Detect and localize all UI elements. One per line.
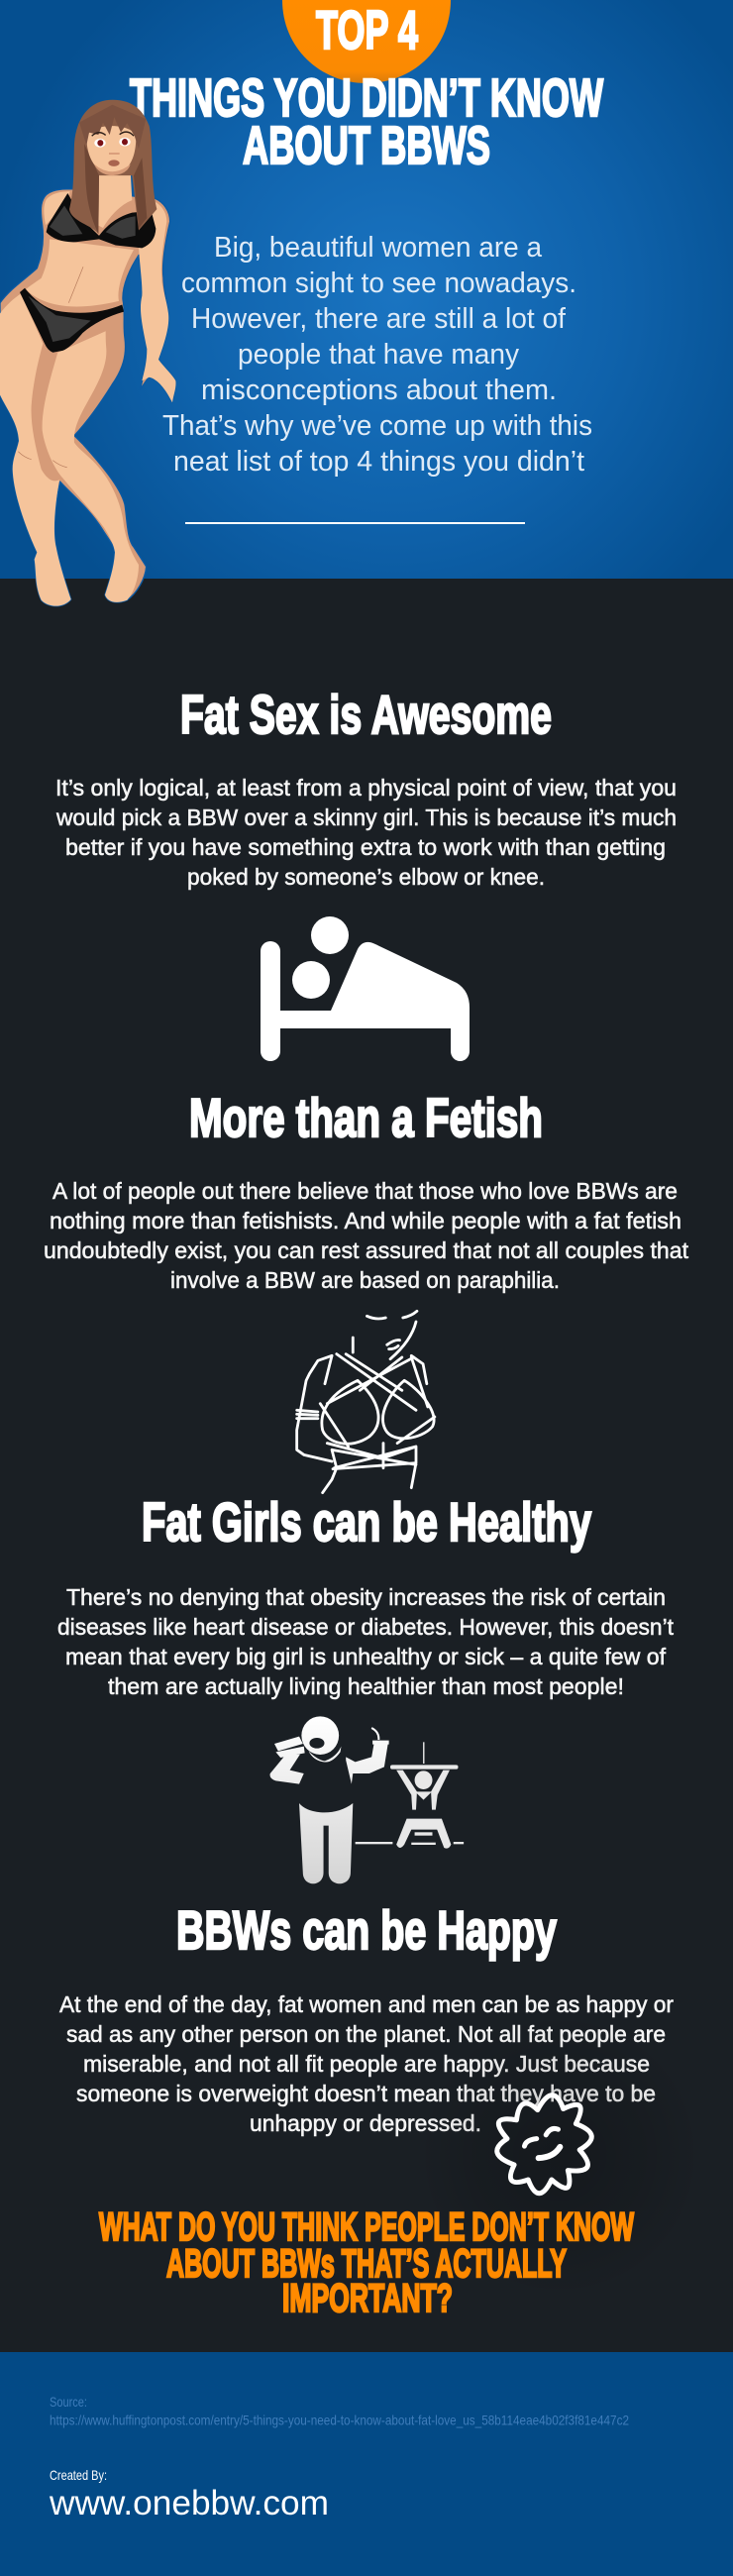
body creases [18, 267, 83, 468]
facial features [92, 132, 134, 166]
skin highlights [0, 170, 176, 606]
body silhouette [0, 189, 176, 606]
body text [57, 1584, 674, 1699]
intro text: people that have many [238, 339, 520, 371]
divider [185, 522, 525, 524]
credit: www.onebbw.com [49, 2484, 329, 2522]
orange badge [282, 0, 451, 83]
heading: BBWs can be Happy [176, 1899, 557, 1961]
credit: Created By: [50, 2467, 107, 2483]
body text: At the end of the day, fat women and men can be as happy or [59, 1991, 674, 2017]
source: https://www.huffingtonpost.com/entry/5-things-you-need-to-know-about-fat-love_us_58b114eae4b02f3f81e447c2 [50, 2412, 629, 2427]
mouth [309, 1738, 324, 1749]
bra [47, 193, 156, 248]
intro text [162, 232, 592, 478]
body text: unhappy or depressed. [250, 2110, 481, 2136]
body text: someone is overweight doesn’t mean that they have to be [76, 2081, 656, 2106]
face [86, 126, 136, 173]
body text: A lot of people out there believe that those who love BBWs are [52, 1178, 678, 1204]
body text: undoubtedly exist, you can rest assured that not all couples that [44, 1237, 688, 1263]
body text [55, 775, 677, 890]
section 3: Fat Girls can be Healthy [57, 1491, 674, 1883]
title [130, 68, 603, 175]
body text: would pick a BBW over a skinny girl. This is because it’s much [55, 805, 677, 830]
body text: nothing more than fetishists. And while people with a fat fetish [50, 1208, 681, 1234]
intro text: neat list of top 4 things you didn’t [173, 446, 584, 478]
hair strands [84, 144, 147, 234]
body text: poked by someone’s elbow or knee. [187, 864, 545, 890]
source: Source: [50, 2394, 87, 2410]
fringe [79, 105, 146, 149]
title: ABOUT BBWS [243, 116, 490, 175]
body text: mean that every big girl is unhealthy or sick – a quite few of [65, 1644, 666, 1669]
panel: hero header [0, 0, 733, 579]
body text: miserable, and not all fit people are happy. Just because [83, 2051, 650, 2077]
icon shadow [416, 2011, 703, 2299]
body text: involve a BBW are based on paraphilia. [170, 1267, 560, 1293]
intro text: However, there are still a lot of [191, 303, 566, 335]
icon: bed [261, 916, 470, 1061]
panel: footer [0, 2352, 733, 2576]
icon: smiling sun [497, 2095, 591, 2194]
section 4: BBWs can be Happy [59, 1899, 703, 2299]
body text: sad as any other person on the planet. Not all fat people are [66, 2021, 666, 2047]
large figure [270, 1716, 389, 1883]
hair back [69, 100, 157, 234]
body text: them are actually living healthier than most people! [108, 1673, 624, 1699]
orange badge: TOP 4 [316, 0, 418, 60]
body text: better if you have something extra to work with than getting [65, 834, 666, 860]
intro text: That’s why we’ve come up with this [162, 410, 592, 442]
footer background [0, 2352, 733, 2576]
body text: There’s no denying that obesity increases the risk of certain [66, 1584, 666, 1610]
section 1: Fat Sex is Awesome [55, 684, 677, 1061]
section 2: More than a Fetish [44, 1087, 688, 1493]
body text [59, 1991, 674, 2136]
bikini bottom [20, 288, 124, 353]
body text: diseases like heart disease or diabetes. However, this doesn’t [57, 1614, 674, 1640]
call to action: IMPORTANT? [282, 2277, 453, 2320]
body text [44, 1178, 688, 1293]
body text: It’s only logical, at least from a physical point of view, that you [55, 775, 677, 801]
source [50, 2394, 629, 2427]
small figure on pull-down machine [356, 1742, 464, 1849]
hero background [0, 0, 733, 579]
credit [49, 2467, 329, 2522]
heading: More than a Fetish [189, 1087, 543, 1148]
icon: rope harness figure [297, 1311, 435, 1493]
intro text: Big, beautiful women are a [214, 232, 542, 264]
intro text: misconceptions about them. [201, 375, 557, 406]
intro text: common sight to see nowadays. [181, 268, 576, 299]
call to action [99, 2205, 634, 2320]
heading: Fat Sex is Awesome [180, 684, 552, 745]
icon: overweight man eating beside person exercising [270, 1716, 464, 1883]
straw [371, 1728, 378, 1740]
illustration: woman in black bikini [0, 100, 176, 606]
